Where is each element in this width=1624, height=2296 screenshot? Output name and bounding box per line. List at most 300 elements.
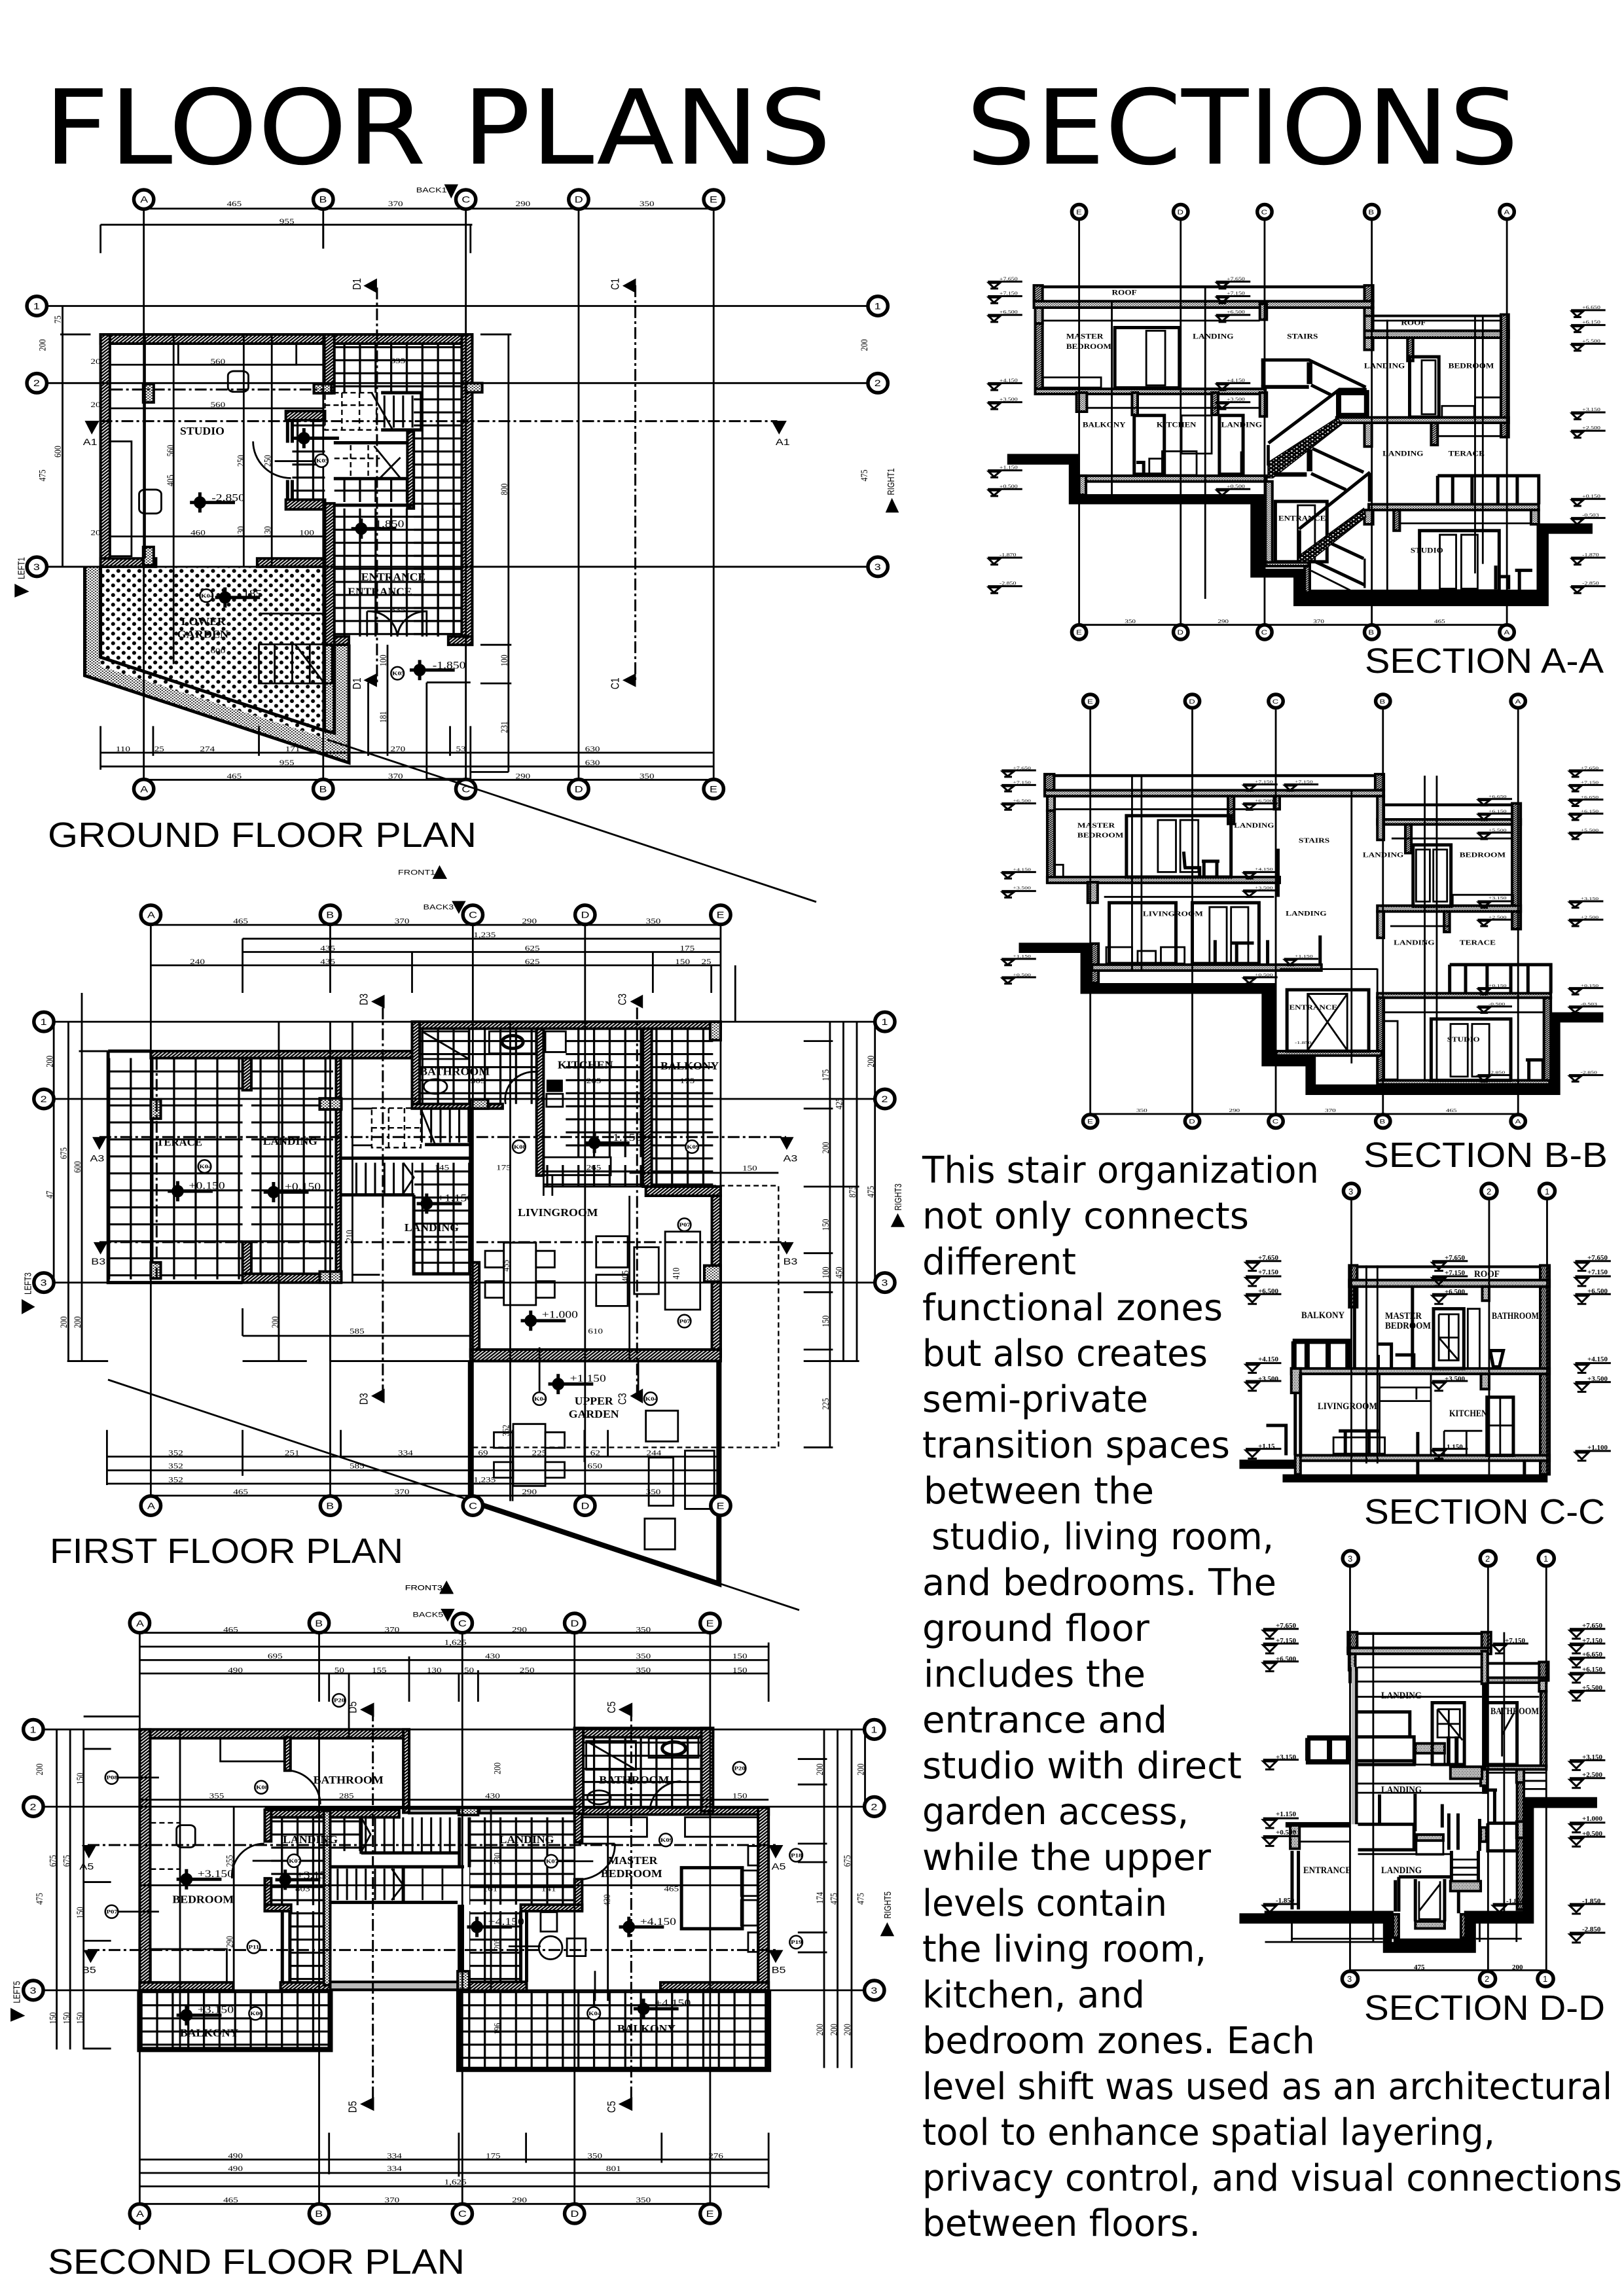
grid labels: E	[710, 194, 717, 205]
section D-D level numbers: +7.150	[1582, 1637, 1603, 1645]
paragraph: stair organization description: kitchen, and	[922, 1974, 1145, 2017]
level numbers: +3.500	[1013, 885, 1031, 890]
grid labels: C	[1261, 209, 1267, 216]
level markers	[168, 1133, 630, 1394]
dimension numbers: 20	[90, 528, 101, 537]
dimension numbers: 290	[516, 200, 530, 208]
view labels: FRONT3	[405, 1583, 442, 1592]
view labels: RIGHT5	[882, 1892, 893, 1918]
paragraph: stair organization description: levels contain	[922, 1882, 1167, 1925]
grid lines	[1091, 701, 1518, 1121]
vertical dimension numbers: 362	[500, 1425, 511, 1437]
section D-D drawing	[1239, 1551, 1605, 1986]
grid labels: A	[147, 1501, 155, 1511]
grid labels: 1	[875, 301, 881, 312]
grid labels: E	[717, 1501, 725, 1511]
grid labels: 3	[30, 1986, 37, 1996]
level numbers	[1013, 765, 1598, 1075]
paragraph: stair organization description: studio, living room,	[931, 1516, 1274, 1558]
level numbers: -1.870	[1582, 552, 1599, 558]
dimension numbers: 695	[268, 1652, 283, 1660]
grid labels: A	[147, 910, 155, 920]
level numbers: +0.150	[285, 1181, 321, 1192]
ground floor plan caption: GROUND FLOOR PLAN	[48, 816, 477, 855]
room labels: ROOF	[1112, 289, 1137, 296]
grid labels: 1	[30, 1725, 37, 1735]
dimension numbers: 290	[1218, 619, 1229, 624]
ground mass	[1239, 1460, 1547, 1482]
level numbers: +0.150	[1489, 982, 1507, 988]
section D-D level numbers: -1.850	[1276, 1897, 1295, 1905]
section D-D level numbers: +6.500	[1276, 1655, 1297, 1663]
level numbers: -2.850	[1489, 1069, 1505, 1075]
room labels: ENTRANCE	[1289, 1003, 1337, 1011]
first floor plan drawing	[22, 901, 905, 1594]
grid labels: D	[570, 2209, 579, 2219]
grid labels: 3	[41, 1278, 47, 1288]
grid labels: 2	[41, 1094, 47, 1104]
furniture	[1043, 378, 1532, 591]
dimension numbers: 352	[168, 1462, 183, 1470]
view labels: C1	[609, 677, 622, 689]
vertical dimension numbers: 800	[499, 483, 509, 495]
level numbers: +6.650	[1581, 795, 1598, 799]
section D-D level numbers: +7.150	[1505, 1637, 1526, 1645]
dimension numbers: 161	[483, 1884, 497, 1893]
title: sections: SECTIONS	[966, 68, 1519, 188]
dimension numbers: 175	[496, 1163, 511, 1172]
room labels: LANDING	[1363, 851, 1404, 859]
door tag labels: P11	[248, 1944, 259, 1950]
level numbers: +6.500	[1000, 309, 1018, 315]
dimension numbers: 290	[512, 2196, 527, 2204]
level numbers: +7.150	[1255, 779, 1273, 784]
dimension numbers: 465	[223, 1625, 238, 1634]
dimension numbers: 465	[1434, 619, 1445, 624]
dimension and floor lines	[1350, 1632, 1546, 1970]
dimension numbers: 1,625	[444, 1638, 467, 1647]
vertical dimension numbers: 150	[47, 2012, 58, 2024]
floor tiles	[139, 1738, 768, 2070]
grid labels: E	[710, 784, 717, 795]
grid bubbles	[24, 1613, 884, 2223]
room labels: LANDING	[1221, 421, 1262, 429]
room labels: STUDIO	[180, 425, 225, 437]
level numbers: -2.850	[1582, 581, 1599, 586]
section D-D room labels: ENTRANCE	[1303, 1865, 1351, 1876]
vertical dimension numbers: 250	[262, 455, 273, 467]
view labels: BACK3	[423, 903, 454, 911]
level numbers: +1.150	[570, 1372, 606, 1384]
view labels: A3	[783, 1153, 797, 1164]
dimension numbers: 1,235	[473, 1475, 496, 1484]
vertical dimension numbers: 250	[235, 455, 246, 467]
grid labels: C	[461, 784, 470, 795]
dimension numbers: 465	[226, 200, 242, 208]
door tag labels: K08	[514, 1144, 526, 1150]
vertical dimension numbers: 675	[61, 1855, 72, 1867]
dimension lines	[57, 1633, 865, 2204]
slabs and walls	[1034, 285, 1539, 594]
section A-A caption: SECTION A-A	[1365, 641, 1604, 681]
room labels: STAIRS	[1299, 836, 1329, 844]
dimension numbers: 335	[390, 605, 405, 614]
dimension numbers: 100	[299, 528, 314, 537]
ground mass	[1019, 942, 1603, 1095]
dimension numbers: 274	[200, 744, 215, 753]
vertical dimension numbers: 600	[52, 446, 63, 457]
level numbers: +3.150	[198, 1868, 234, 1879]
balcony railing	[1306, 1738, 1350, 1762]
room labels: LANDING	[1394, 939, 1435, 946]
room labels: LANDING	[1286, 909, 1327, 917]
section B-B drawing	[1001, 694, 1603, 1128]
grid labels: E	[706, 1619, 714, 1628]
grid labels: 2	[33, 378, 40, 389]
paragraph: stair organization description: level shift was used as an architectural	[922, 2066, 1612, 2108]
room labels	[156, 1060, 719, 1420]
room labels: STUDIO	[1411, 547, 1443, 554]
vertical dimension numbers: 231	[499, 721, 509, 733]
vertical dimension numbers: 600	[72, 1161, 83, 1173]
section C-C level numbers: +4.150	[1258, 1355, 1279, 1363]
walls	[139, 1728, 768, 1991]
dimension numbers: 430	[485, 1652, 500, 1660]
level numbers	[198, 1868, 691, 2015]
level numbers: -0.503	[1581, 1001, 1597, 1007]
dimension numbers: 370	[1325, 1108, 1336, 1113]
doors and windows	[1110, 816, 1511, 1081]
ground mass	[1239, 1797, 1597, 1953]
level numbers: -1.870	[1000, 552, 1016, 558]
door tag labels: P19	[791, 1939, 803, 1946]
grid labels: 2	[30, 1802, 37, 1812]
door tag labels: K04	[588, 2011, 601, 2017]
vertical dimension numbers: 150	[74, 2012, 85, 2024]
section C-C level numbers: +7.150	[1258, 1268, 1279, 1276]
paragraph: stair organization description: and bedrooms. The	[922, 1562, 1276, 1604]
door tag labels: P20	[334, 1698, 345, 1704]
section C-C level numbers: +3.500	[1587, 1375, 1608, 1383]
grid lines	[1351, 1191, 1547, 1475]
section D-D grid labels: 2	[1485, 1554, 1490, 1564]
section C-C level numbers: +7.650	[1258, 1254, 1279, 1262]
dimension numbers: 803	[295, 1884, 310, 1893]
vertical dimension numbers: 196	[492, 2023, 503, 2035]
grid lines	[37, 200, 878, 789]
grid labels: E	[1076, 209, 1082, 216]
dimension numbers: 250	[520, 1666, 535, 1674]
vertical dimension numbers	[37, 315, 869, 733]
vertical dimension numbers: 875	[847, 1186, 858, 1198]
room labels: BALKONY	[1083, 421, 1126, 429]
roof and upper slabs	[1348, 1632, 1548, 1767]
view labels: FRONT3	[405, 1583, 442, 1592]
dimension lines	[1055, 776, 1544, 1114]
dimension numbers: 175	[486, 2151, 501, 2160]
grid labels: A	[1504, 630, 1510, 636]
level numbers: +0.500	[1227, 484, 1245, 489]
ground mass	[1007, 454, 1593, 606]
level numbers: +3.15	[297, 1869, 326, 1880]
floor tiles and garden	[84, 344, 461, 762]
dimension numbers	[1136, 1108, 1457, 1113]
dimension numbers: 465	[664, 1884, 679, 1893]
grid labels: D	[1189, 1119, 1195, 1125]
vertical dimension numbers: 150	[820, 1219, 831, 1230]
vertical dimension numbers: 450	[833, 1266, 844, 1278]
stair core	[287, 393, 422, 509]
stair core	[330, 1818, 464, 1903]
level numbers: +6.650	[1489, 794, 1507, 799]
level numbers: +2.500	[1489, 914, 1507, 920]
paragraph: stair organization description: not only connects	[922, 1195, 1249, 1238]
dimension lines	[1043, 288, 1531, 625]
grid labels: D	[1177, 209, 1183, 216]
room labels: MASTER	[1077, 821, 1115, 829]
view labels: C3	[616, 1393, 629, 1405]
level numbers: +2.500	[1581, 914, 1598, 920]
level numbers: .185	[240, 588, 262, 600]
grid labels: C	[1261, 630, 1267, 636]
dimension numbers: 955	[280, 758, 295, 767]
section D-D level numbers: +1.150	[1276, 1810, 1297, 1818]
view labels: D5	[346, 2101, 359, 2113]
room labels: LANDING	[405, 1222, 459, 1234]
section C-C level numbers: +6.500	[1587, 1287, 1608, 1295]
dimension numbers	[90, 200, 655, 780]
dimension numbers: 69	[478, 1448, 488, 1457]
dimension numbers: 350	[636, 2196, 651, 2204]
grid labels: E	[1076, 630, 1082, 636]
section C-C level numbers: +3.500	[1258, 1375, 1279, 1383]
section C-C room labels: BALKONY	[1301, 1310, 1344, 1321]
grid labels: 3	[875, 562, 881, 572]
grid labels: B	[326, 1501, 334, 1511]
section D-D level numbers: +0.500	[1582, 1830, 1603, 1838]
room labels	[1066, 289, 1494, 554]
dimension numbers: 490	[228, 2151, 243, 2160]
room labels: KITCHEN	[558, 1060, 613, 1071]
vertical dimension numbers: 174	[814, 1892, 825, 1904]
view labels: RIGHT1	[886, 468, 896, 495]
vertical dimension numbers: 475	[855, 1893, 866, 1905]
dimension numbers: 50	[334, 1666, 344, 1674]
grid labels: B	[315, 2209, 323, 2219]
view labels: D3	[357, 1393, 370, 1405]
view labels: D1	[350, 677, 363, 689]
grid labels: 1	[41, 1017, 47, 1028]
paragraph: stair organization description: between floors.	[922, 2202, 1200, 2245]
vertical dimension numbers: 455	[500, 1260, 511, 1272]
second floor plan caption: SECOND FLOOR PLAN	[48, 2242, 465, 2282]
dimension numbers: 350	[1125, 619, 1136, 624]
dimension numbers: 155	[372, 1666, 387, 1674]
dimension numbers	[168, 917, 757, 1496]
section D-D level numbers: -1.850	[1582, 1897, 1601, 1905]
dimension numbers: 1,625	[444, 2178, 467, 2186]
section C-C level numbers: +7.650	[1445, 1254, 1466, 1262]
furniture	[1055, 852, 1543, 1081]
dimension numbers: 465	[233, 1488, 248, 1496]
section C-C level numbers: +7.150	[1587, 1268, 1608, 1276]
vertical dimension numbers	[34, 1763, 866, 2036]
level numbers: +7.650	[1581, 765, 1598, 770]
level numbers: -1.850	[433, 660, 466, 671]
upper garden outline	[471, 1361, 719, 1584]
dimension numbers: 352	[168, 1475, 183, 1484]
room labels: BEDROOM	[1066, 342, 1111, 351]
level numbers: -2.850	[1000, 581, 1016, 586]
grid bubbles	[1083, 694, 1525, 1128]
door tag labels: K05	[316, 458, 329, 464]
balcony railing	[1293, 1341, 1350, 1369]
dimension numbers: 370	[388, 772, 403, 780]
vertical dimension numbers: 675	[47, 1855, 58, 1867]
level markers	[1246, 1261, 1611, 1461]
view labels: A3	[90, 1153, 104, 1164]
grid lines	[1350, 1558, 1546, 1979]
dimension numbers: 265	[586, 1163, 602, 1172]
level numbers: -2.850	[1581, 1069, 1597, 1075]
level numbers: +0.150	[1581, 982, 1598, 988]
dimension numbers: 285	[339, 1791, 354, 1800]
dimension numbers: 370	[388, 200, 403, 208]
room labels: LANDING	[1193, 332, 1234, 340]
dimension numbers: 350	[636, 1625, 651, 1634]
room labels: LANDING	[283, 1834, 338, 1846]
level numbers: 1.850	[375, 518, 405, 529]
vertical dimension numbers: 47	[44, 1191, 55, 1198]
level numbers: +1.000	[542, 1309, 578, 1320]
level numbers: +7.650	[1000, 276, 1018, 281]
door tag labels: K04	[201, 593, 213, 600]
level numbers: +1.150	[605, 1132, 641, 1143]
view labels: RIGHT3	[893, 1183, 903, 1210]
grid labels: B	[319, 784, 327, 795]
vertical dimension numbers: 200	[270, 1316, 280, 1328]
level numbers: +5.500	[1581, 827, 1598, 833]
room labels: BALKONY	[660, 1060, 719, 1072]
vertical dimension numbers: 200	[855, 1763, 866, 1775]
room labels: GARDEN	[569, 1408, 619, 1420]
vertical dimension numbers: 475	[37, 469, 48, 481]
grid labels: C	[458, 2209, 467, 2219]
level numbers: +4.150	[488, 1916, 524, 1928]
room labels: STUDIO	[1447, 1035, 1480, 1043]
door tag labels: K05	[392, 670, 405, 677]
room labels: ROOF	[1401, 319, 1426, 327]
section D-D grid labels: 2	[1485, 1974, 1489, 1984]
grid labels: 1	[881, 1017, 888, 1028]
room labels: LANDING	[1382, 449, 1424, 457]
dimension numbers: 290	[522, 917, 537, 925]
dimension numbers: 610	[588, 1327, 603, 1335]
first floor plan caption: FIRST FLOOR PLAN	[50, 1532, 403, 1571]
level numbers: +3.500	[1227, 397, 1245, 402]
dimension numbers: 62	[590, 1448, 600, 1457]
level numbers: +1.150	[1295, 954, 1313, 959]
dimension numbers: 585	[350, 1327, 365, 1335]
section A-A drawing	[988, 204, 1606, 639]
grid labels: 3	[881, 1278, 888, 1288]
paragraph: stair organization description: bedroom zones. Each	[922, 2020, 1315, 2062]
section C-C level numbers: +6.500	[1445, 1288, 1466, 1296]
section D-D level numbers: -2.850	[1582, 1926, 1601, 1933]
lower stair and pit	[1266, 1772, 1547, 1942]
section C-C level numbers: +7.150	[1445, 1269, 1466, 1277]
section D-D grid labels: 3	[1348, 1554, 1352, 1564]
level numbers: +1.150	[437, 1192, 473, 1204]
section C-C level numbers: +7.650	[1587, 1254, 1608, 1262]
section D-D room labels: LANDING	[1381, 1785, 1422, 1795]
room labels: BATHROOM	[314, 1774, 384, 1786]
vertical dimension numbers: 200	[37, 339, 48, 351]
door tag labels: K04	[645, 1396, 658, 1403]
view labels: LEFT5	[11, 1981, 22, 2003]
paragraph: stair organization description: ground floor	[922, 1607, 1150, 1650]
dimension numbers: 350	[640, 772, 655, 780]
level numbers: -2.850	[211, 492, 245, 503]
section C-C drawing	[1239, 1183, 1611, 1482]
paragraph: stair organization description: but also creates	[922, 1333, 1208, 1375]
grid labels	[33, 194, 881, 795]
dimension numbers: 350	[646, 1488, 661, 1496]
outer terrace outline	[108, 1051, 243, 1283]
dimension numbers: 465	[233, 917, 248, 925]
grid labels: A	[136, 1619, 144, 1628]
grid labels: A	[140, 784, 149, 795]
level numbers: +7.150	[1000, 291, 1018, 296]
room labels: ENTRANCE	[361, 571, 425, 583]
grid bubbles	[1342, 1551, 1554, 1986]
section D-D level numbers	[1276, 1622, 1603, 1971]
level numbers: +4.150	[1000, 378, 1018, 383]
vertical dimension numbers: 205	[492, 1938, 503, 1950]
vertical dimension numbers: 200	[44, 1056, 55, 1067]
slabs and walls	[1291, 1265, 1549, 1475]
dimension numbers: 251	[285, 1448, 300, 1457]
view labels: A1	[83, 437, 98, 448]
vertical dimension numbers: 405	[165, 475, 176, 486]
view labels: B5	[772, 1965, 786, 1975]
dimension numbers: 955	[280, 217, 295, 226]
vertical dimension numbers: 150	[74, 1907, 85, 1918]
grid labels: 2	[881, 1094, 888, 1104]
dimension numbers: 334	[398, 1448, 413, 1457]
grid labels: D	[575, 784, 583, 795]
paragraph: stair organization description: garden access,	[922, 1791, 1189, 1833]
door tag labels: K08	[256, 1784, 268, 1791]
dimension numbers: 630	[585, 758, 600, 767]
room labels: BEDROOM	[1460, 851, 1506, 859]
title: floor plans: FLOOR PLANS	[44, 68, 831, 188]
grid labels: C	[1272, 1119, 1278, 1125]
section D-D level numbers: +7.150	[1276, 1637, 1297, 1645]
grid labels: B	[1380, 1119, 1385, 1125]
vertical dimension numbers: 475	[859, 469, 869, 481]
room labels: STAIRS	[1287, 332, 1318, 340]
section C-C caption: SECTION C-C	[1364, 1492, 1605, 1532]
dimension numbers: 560	[210, 357, 225, 365]
entrance volume	[1265, 1822, 1522, 1942]
level numbers: +4.150	[655, 1998, 691, 2009]
vertical dimension numbers: 200	[492, 1763, 503, 1774]
vertical dimension numbers: 425	[833, 1098, 844, 1109]
door tag labels: P07	[679, 1318, 691, 1325]
dimension numbers: 801	[606, 2164, 621, 2173]
level numbers: +4.150	[640, 1916, 676, 1928]
